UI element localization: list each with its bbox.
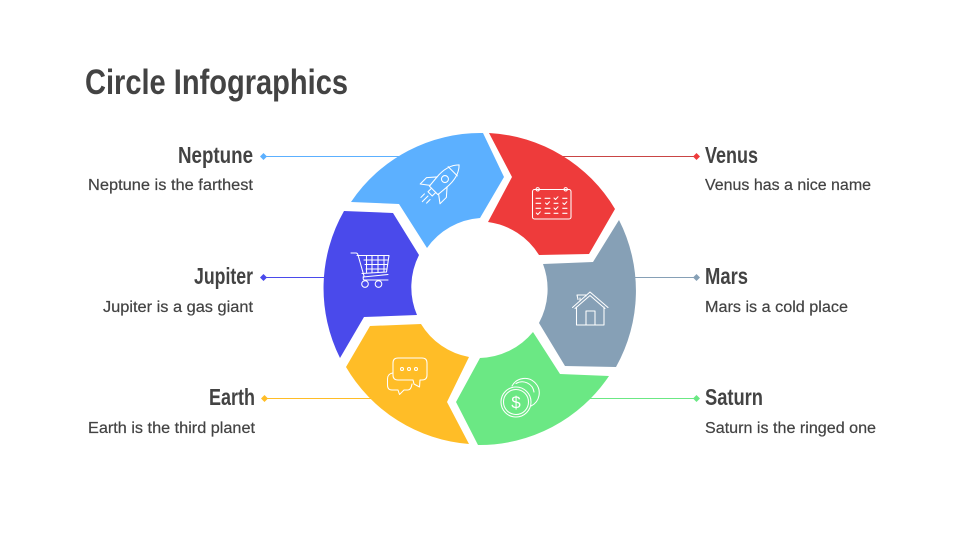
label: Jupiter [103, 263, 328, 316]
label: Jupiter: Jupiter is a gas giant [103, 299, 254, 316]
icon: shopping cart [351, 253, 389, 287]
icon: calendar [532, 188, 571, 219]
label: Mars: Mars is a cold place [705, 299, 848, 316]
segment: Earth [346, 324, 469, 444]
label: Mars [632, 263, 848, 316]
label: Neptune: Neptune [178, 142, 253, 168]
segment: Jupiter [324, 211, 419, 358]
label: Earth: Earth is the third planet [88, 420, 256, 437]
label: Saturn [590, 384, 876, 437]
label: Earth [88, 384, 372, 437]
label: Saturn: Saturn [705, 384, 763, 410]
segment: Mars [539, 220, 636, 367]
label: Neptune [88, 142, 400, 194]
title: Circle Infographics [85, 63, 348, 102]
segment: Neptune [351, 133, 504, 248]
label: Earth: Earth [209, 384, 255, 410]
label: Jupiter: Jupiter [194, 263, 253, 289]
label: Saturn: Saturn is the ringed one [705, 420, 876, 437]
label: Venus: Venus [705, 142, 758, 168]
label: Mars: Mars [705, 263, 748, 289]
icon: coins [501, 378, 539, 417]
label: Neptune: Neptune is the farthest [88, 177, 254, 194]
label: Venus: Venus has a nice name [705, 177, 871, 194]
label: Venus [560, 142, 871, 194]
segment: Venus [488, 133, 615, 255]
icon: house [572, 292, 608, 325]
icon: speech bubbles [388, 358, 427, 394]
icon: rocket [412, 155, 469, 212]
icon: coins: $ [511, 393, 521, 412]
segment: Saturn [456, 332, 609, 445]
